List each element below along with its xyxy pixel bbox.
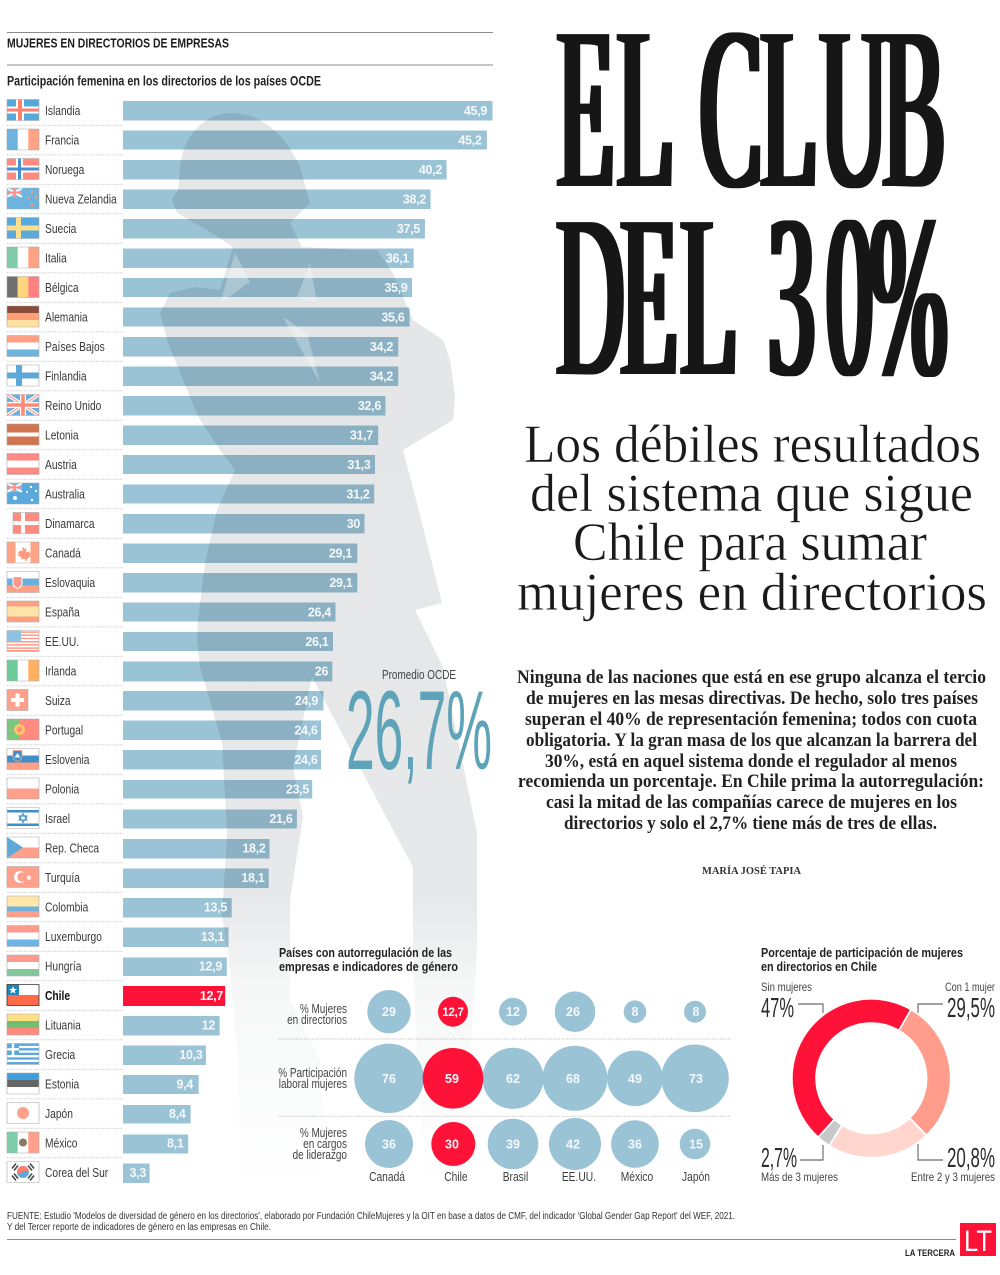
column labels: México: [621, 1171, 653, 1184]
row labels: % Mujeres: [300, 1003, 347, 1016]
country labels: Hungría: [45, 961, 82, 974]
bar value labels: 34,2: [370, 340, 393, 354]
bubble values: [382, 1005, 703, 1152]
row labels: % Participación: [278, 1067, 347, 1080]
column labels: Brasil: [503, 1171, 528, 1184]
bar value labels: 29,1: [329, 576, 353, 590]
country labels: Noruega: [45, 164, 85, 177]
row labels: de liderazgo: [293, 1149, 347, 1162]
flag: Dinamarca: [13, 512, 39, 534]
row labels: [278, 1003, 347, 1162]
donut label: sin mujeres: 47%: [761, 992, 794, 1023]
subtitle: [517, 414, 987, 622]
bubble values: 68: [566, 1072, 580, 1086]
byline: MARÍA JOSÉ TAPIA: [702, 865, 801, 877]
bubble chart: [278, 990, 731, 1184]
country labels: Chile: [45, 990, 70, 1003]
bubble values: 30: [445, 1138, 459, 1152]
country labels: Polonia: [45, 784, 80, 797]
bubble values: 73: [689, 1072, 703, 1086]
flag: Nueva Zelandia: [7, 188, 39, 209]
segment: con 1 mujer: [905, 1020, 939, 1127]
bar value labels: [130, 104, 487, 1180]
column labels: [369, 1171, 710, 1184]
main title: [557, 0, 947, 425]
bubble chart heading: [279, 945, 458, 974]
bubble values: 15: [689, 1138, 703, 1152]
flag: Eslovaquia: [7, 572, 39, 592]
flag: Colombia: [7, 896, 39, 917]
country labels: Italia: [45, 253, 67, 266]
logo: LT: LT: [964, 1225, 992, 1258]
bar value labels: 45,2: [458, 134, 482, 148]
country labels: México: [45, 1138, 77, 1151]
segment: entre 2 y 3 mujeres: [836, 1127, 918, 1146]
bubble values: 12: [506, 1005, 520, 1019]
country labels: Grecia: [45, 1049, 76, 1062]
country labels: España: [45, 607, 80, 620]
flag: Rep. Checa: [7, 837, 39, 858]
country labels: Irlanda: [45, 666, 77, 679]
flag: Estonia: [7, 1073, 39, 1094]
intro paragraph: directorios y solo el 2,7% tiene más de tres de ellas.: [564, 813, 937, 834]
flag: EE.UU.: [7, 630, 39, 652]
country labels: Estonia: [45, 1079, 80, 1092]
column labels: EE.UU.: [562, 1171, 596, 1184]
flag: Lituania: [7, 1014, 39, 1035]
bar value labels: 30: [347, 517, 360, 531]
bar value labels: 26: [315, 664, 328, 678]
bar value labels: 8,4: [169, 1107, 186, 1121]
bar value labels: 12,7: [200, 989, 223, 1003]
bar value labels: 18,1: [241, 871, 265, 885]
bubble values: 8: [693, 1005, 700, 1019]
flag: Canadá: [7, 542, 39, 563]
bubbles: row 1: [367, 990, 706, 1033]
flag: Irlanda: [7, 660, 39, 681]
country labels: Luxemburgo: [45, 931, 102, 944]
flag: Australia: [7, 483, 39, 504]
bubble chart heading: empresas e indicadores de género: [279, 959, 458, 974]
bar value labels: 13,5: [204, 900, 227, 914]
row labels: laboral mujeres: [279, 1078, 347, 1091]
bar chart: bars: [123, 101, 492, 1183]
country labels: Dinamarca: [45, 518, 95, 531]
silhouette: shirt collar highlights: [220, 253, 320, 383]
flag: Bélgica: [7, 276, 39, 298]
bubble values: 12,7: [442, 1007, 464, 1019]
flag: Finlandia: [7, 365, 39, 386]
bubble values: 26: [566, 1005, 580, 1019]
bar value labels: 38,2: [403, 192, 426, 206]
country labels: Rep. Checa: [45, 843, 100, 856]
bar value labels: 12: [202, 1018, 215, 1032]
bar value labels: 24,6: [294, 724, 318, 738]
bar value labels: 36,1: [386, 252, 409, 266]
subtitle: mujeres en directorios: [517, 562, 987, 622]
bar value labels: 37,5: [397, 222, 420, 236]
flag: Letonia: [7, 424, 39, 445]
source note: FUENTE: Estudio 'Modelos de diversidad de género en los directorios', elaborado por Fundación ChileMujeres y la OIT en base a datos de CMF, del indicador 'Global Gender Gap Report' del WEF, 2021.: [7, 1211, 735, 1222]
bar value labels: 29,1: [329, 546, 352, 560]
column labels: Chile: [444, 1171, 468, 1184]
donut label: mas de 3 mujeres: 2,7%: [761, 1142, 797, 1173]
flag: Hungría: [7, 955, 39, 976]
bar value labels: 21,6: [269, 812, 293, 826]
subtitle: Chile para sumar: [573, 512, 927, 572]
bar chart subtitle: Participación femenina en los directorios de los países OCDE: [7, 74, 321, 88]
flag: Alemania: [7, 306, 39, 327]
donut heading: en directorios en Chile: [761, 959, 877, 974]
bubble values: 76: [382, 1072, 396, 1086]
column labels: Canadá: [369, 1171, 406, 1184]
flag: España: [7, 601, 39, 622]
country labels: Colombia: [45, 902, 89, 915]
bubble values: 39: [506, 1138, 520, 1152]
flag: Eslovenia: [7, 748, 39, 770]
bubble values: 8: [632, 1005, 639, 1019]
bubble values: 36: [382, 1138, 396, 1152]
flag: Suecia: [7, 218, 39, 238]
flag: Portugal: [7, 719, 39, 740]
donut heading: Porcentaje de participación de mujeres: [761, 945, 963, 960]
flag: Suiza: [7, 690, 28, 710]
bar value labels: 24,9: [295, 694, 318, 708]
bubble values: 36: [628, 1138, 642, 1152]
bar value labels: 45,9: [464, 104, 487, 118]
flag: Corea del Sur: [7, 1162, 39, 1182]
country labels: Reino Unido: [45, 400, 101, 413]
country labels: EE.UU.: [45, 636, 79, 649]
bar value labels: 9,4: [177, 1078, 193, 1092]
flag: Noruega: [7, 158, 39, 180]
bar value labels: 23,5: [286, 782, 309, 796]
donut label: mas de 3 mujeres: Más de 3 mujeres: [761, 1170, 838, 1184]
flag: Israel: [7, 808, 39, 828]
country labels: Suecia: [45, 223, 77, 236]
donut label: sin mujeres: Sin mujeres: [761, 980, 812, 994]
bar: Chile highlighted: [123, 986, 225, 1006]
bar value labels: 31,7: [350, 428, 373, 442]
donut chart: [804, 1009, 939, 1146]
country labels: Países Bajos: [45, 341, 105, 354]
bar value labels: 10,3: [179, 1048, 203, 1062]
bar value labels: 35,6: [381, 310, 405, 324]
country labels: Turquía: [45, 872, 80, 885]
flag: Francia: [7, 129, 39, 150]
flag: Turquía: [7, 866, 39, 888]
subtitle: del sistema que sigue: [530, 463, 973, 523]
country labels: Austria: [45, 459, 77, 472]
intro paragraph: [517, 667, 986, 834]
bubble values: 29: [382, 1005, 396, 1019]
flag: Polonia: [7, 778, 39, 799]
text: 26,7%: [346, 668, 492, 793]
donut heading: [761, 945, 963, 974]
bubble chart heading: Países con autorregulación de las: [279, 945, 452, 960]
segment: sin mujeres: [804, 1011, 905, 1128]
bar value labels: 35,9: [384, 281, 408, 295]
OECD average callout: Promedio OCDE: [382, 667, 456, 682]
bar value labels: 13,1: [201, 930, 224, 944]
country labels: Japón: [45, 1108, 73, 1121]
row labels: % Mujeres: [300, 1127, 347, 1140]
bar value labels: 34,2: [370, 370, 393, 384]
subtitle: Los débiles resultados: [524, 414, 981, 474]
country labels: Israel: [45, 813, 70, 826]
flag: Reino Unido: [7, 394, 39, 416]
bubble values: 49: [628, 1072, 642, 1086]
donut label: con 1 mujer: [918, 980, 995, 1023]
bubbles: row 3: [365, 1118, 710, 1170]
row labels: en directorios: [287, 1014, 347, 1027]
bar value labels: 18,2: [242, 842, 266, 856]
bar value labels: 26,1: [305, 635, 329, 649]
flag: Japón: [7, 1102, 39, 1124]
country labels: Nueva Zelandia: [45, 194, 117, 207]
main title: DEL 30%: [557, 169, 947, 425]
flag: México: [7, 1132, 39, 1153]
country labels: Australia: [45, 489, 85, 502]
donut label: mas de 3 mujeres: [761, 1142, 838, 1184]
country labels: Corea del Sur: [45, 1167, 108, 1180]
bar value labels: 3,3: [130, 1166, 146, 1180]
donut label: entre 2 y 3 mujeres: [911, 1142, 995, 1184]
source note: Y del Tercer reporte de indicadores de género en las empresas en Chile.: [7, 1222, 271, 1233]
country labels: Portugal: [45, 725, 83, 738]
country labels: Islandia: [45, 105, 81, 118]
country labels: Finlandia: [45, 371, 87, 384]
bubble values: 42: [566, 1138, 580, 1152]
bar value labels: 24,6: [294, 753, 318, 767]
country labels: [45, 105, 117, 1180]
row labels: en cargos: [303, 1138, 347, 1151]
bubble values: 59: [445, 1072, 459, 1086]
bar value labels: 26,4: [308, 606, 331, 620]
country labels: Lituania: [45, 1020, 81, 1033]
intro paragraph: casi la mitad de las compañías carece de mujeres en los: [546, 792, 957, 813]
bubbles: row 2: [354, 1044, 729, 1113]
bubble values: 62: [506, 1072, 520, 1086]
intro paragraph: 30%, está en aquel sistema donde el regulador al menos: [545, 751, 957, 772]
bar value labels: 12,9: [199, 960, 222, 974]
OECD average callout: [346, 667, 492, 793]
flag: Grecia: [7, 1044, 39, 1064]
bar value labels: 31,2: [346, 488, 370, 502]
section heading: MUJERES EN DIRECTORIOS DE EMPRESAS: [7, 36, 229, 50]
country labels: Suiza: [45, 695, 71, 708]
flags column: [7, 100, 39, 1182]
bar value labels: 8,1: [167, 1136, 184, 1150]
source note: [7, 1211, 735, 1233]
donut label: sin mujeres: [761, 980, 823, 1023]
flag: Italia: [7, 247, 39, 268]
segment: más de 3 mujeres: [826, 1128, 836, 1135]
publisher name: LA TERCERA: [905, 1248, 955, 1259]
country labels: Bélgica: [45, 282, 79, 295]
country labels: Canadá: [45, 548, 81, 561]
country labels: Letonia: [45, 430, 79, 443]
country labels: Alemania: [45, 312, 88, 325]
flag: Austria: [7, 454, 39, 474]
flag: Países Bajos: [7, 336, 39, 356]
bar value labels: 32,6: [358, 399, 381, 413]
column labels: Japón: [682, 1171, 710, 1184]
silhouette of a woman: [160, 113, 477, 1190]
country labels: Eslovaquia: [45, 577, 96, 590]
bar value labels: 40,2: [419, 163, 442, 177]
country labels: Eslovenia: [45, 754, 90, 767]
flag: Islandia: [7, 100, 39, 120]
bar value labels: 31,3: [347, 458, 371, 472]
flag: Luxemburgo: [7, 926, 39, 946]
flag: Chile: [7, 984, 39, 1006]
country labels: Francia: [45, 135, 80, 148]
